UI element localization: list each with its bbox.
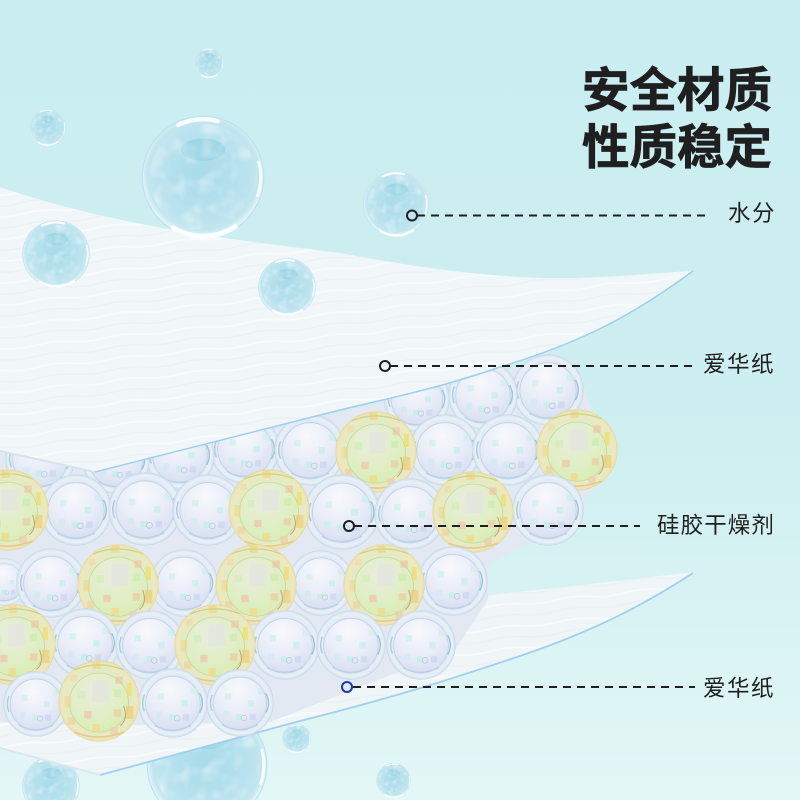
- desiccant beads: row 3: [0, 470, 583, 552]
- filler between beads: [0, 362, 610, 726]
- callout: upper paper: [380, 352, 775, 377]
- bottom paper layer: [0, 572, 693, 776]
- desiccant beads: row 2: [275, 410, 617, 492]
- callout: upper paper: 爱华纸: [703, 352, 775, 377]
- callout: water: [407, 201, 776, 226]
- desiccant beads: row 5: [0, 605, 455, 685]
- top paper layer: [0, 187, 693, 472]
- title: [582, 65, 772, 175]
- callout: silica gel: [344, 513, 775, 538]
- callout: lower paper: [342, 676, 775, 701]
- upper water bubbles: [23, 48, 428, 315]
- title: 性质稳定: [582, 122, 772, 175]
- title: 安全材质: [582, 65, 772, 118]
- desiccant beads: front row: [4, 661, 273, 741]
- desiccant beads: row 4: [0, 545, 487, 625]
- callout: lower paper: 爱华纸: [703, 676, 775, 701]
- lower water bubbles: [23, 705, 411, 800]
- callout: water: 水分: [728, 201, 776, 226]
- desiccant beads: back row: [6, 355, 583, 493]
- callout: silica gel: 硅胶干燥剂: [657, 513, 775, 538]
